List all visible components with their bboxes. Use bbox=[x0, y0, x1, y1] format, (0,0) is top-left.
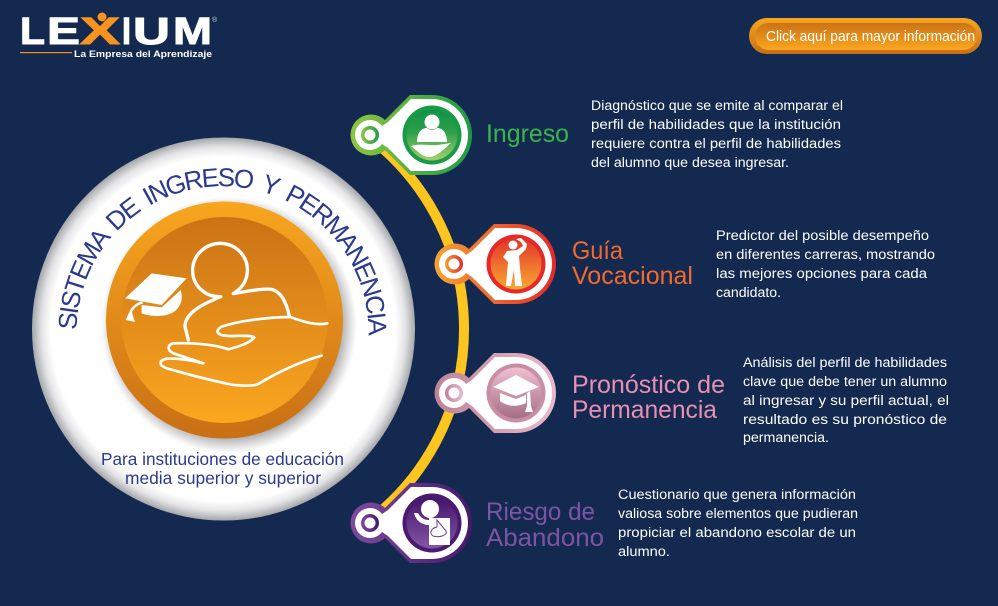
icon: thinking figure bbox=[503, 238, 527, 286]
icon: student with backpack bbox=[414, 500, 450, 545]
text: Guía description: las mejores opciones para cada bbox=[716, 266, 928, 281]
logo: Lexium: La Empresa del Aprendizaje bbox=[74, 49, 212, 60]
orange emblem bbox=[101, 197, 357, 453]
text: Ingreso description: perfil de habilidades que la institución bbox=[591, 117, 841, 132]
text: Riesgo description: valiosa sobre elementos que pudieran bbox=[618, 506, 858, 521]
caption bbox=[101, 449, 344, 488]
logo: Lexium bbox=[20, 11, 218, 60]
label: Guía Vocacional: Vocacional bbox=[572, 262, 693, 290]
text: Guía description: candidato. bbox=[716, 285, 781, 300]
badge: Ingreso bbox=[351, 95, 472, 175]
text: Guía description: en diferentes carreras, mostrando bbox=[716, 247, 935, 262]
connector arc bbox=[366, 135, 464, 523]
curved title: SISTEMA DE INGRESO Y PERMANENCIA bbox=[58, 168, 386, 336]
icon: graduation cap bbox=[493, 375, 539, 412]
text: Riesgo description: alumno. bbox=[618, 544, 670, 559]
text: Pronóstico description: clave que debe tener un alumno bbox=[743, 374, 947, 389]
logo: Lexium: L bbox=[20, 11, 45, 53]
label: Guía Vocacional: Guía bbox=[572, 237, 623, 265]
label: Riesgo de Abandono bbox=[486, 498, 604, 552]
text: Guía description bbox=[716, 228, 935, 300]
label: Ingreso: Ingreso bbox=[486, 120, 569, 148]
button: mayor información: Click aquí para mayor información bbox=[766, 29, 975, 45]
text: Ingreso description: del alumno que desea ingresar. bbox=[591, 155, 789, 170]
label: Riesgo de Abandono: Riesgo de bbox=[486, 498, 595, 526]
label: Guía Vocacional bbox=[572, 237, 693, 290]
text: Pronóstico description: permanencia. bbox=[743, 430, 829, 445]
logo: Lexium: M bbox=[173, 11, 212, 53]
icon: person and hand bbox=[411, 114, 451, 157]
label: Pronóstico de Permanencia: Pronóstico de bbox=[572, 371, 725, 399]
text: Ingreso description: Diagnóstico que se emite al comparar el bbox=[591, 98, 843, 113]
caption: media superior y superior bbox=[125, 468, 321, 488]
icon: student and hand bbox=[125, 243, 327, 386]
text: Pronóstico description bbox=[743, 355, 949, 445]
label: Riesgo de Abandono: Abandono bbox=[486, 524, 604, 552]
panel: central disc bbox=[32, 138, 415, 520]
text: Riesgo description: Cuestionario que genera información bbox=[618, 487, 856, 502]
text: Pronóstico description: resultado es su pronóstico de bbox=[743, 412, 947, 427]
badge: Guía Vocacional bbox=[435, 224, 556, 304]
logo: Lexium: ® bbox=[212, 16, 218, 24]
logo: Lexium: U bbox=[133, 11, 170, 53]
label: Pronóstico de Permanencia: Permanencia bbox=[572, 396, 717, 424]
badge: Riesgo de Abandono bbox=[351, 483, 472, 563]
label: Pronóstico de Permanencia bbox=[572, 371, 725, 424]
caption: Para instituciones de educación bbox=[101, 449, 344, 469]
text: Pronóstico description: al ingresar y su perfil actual, el bbox=[743, 393, 949, 408]
logo: Lexium: X bbox=[80, 11, 121, 53]
text: Pronóstico description: Análisis del perfil de habilidades bbox=[743, 355, 947, 370]
logo: Lexium: E bbox=[47, 11, 80, 53]
text: Ingreso description bbox=[591, 98, 843, 170]
text: Riesgo description: propiciar el abandono escolar de un bbox=[618, 525, 856, 540]
text: Riesgo description bbox=[618, 487, 858, 559]
text: Ingreso description: requiere contra el perfil de habilidades bbox=[591, 136, 841, 151]
badge: Pronóstico de Permanencia bbox=[435, 353, 556, 433]
button: mayor información bbox=[749, 18, 982, 54]
logo: Lexium: I bbox=[122, 11, 131, 53]
text: Guía description: Predictor del posible desempeño bbox=[716, 228, 929, 243]
